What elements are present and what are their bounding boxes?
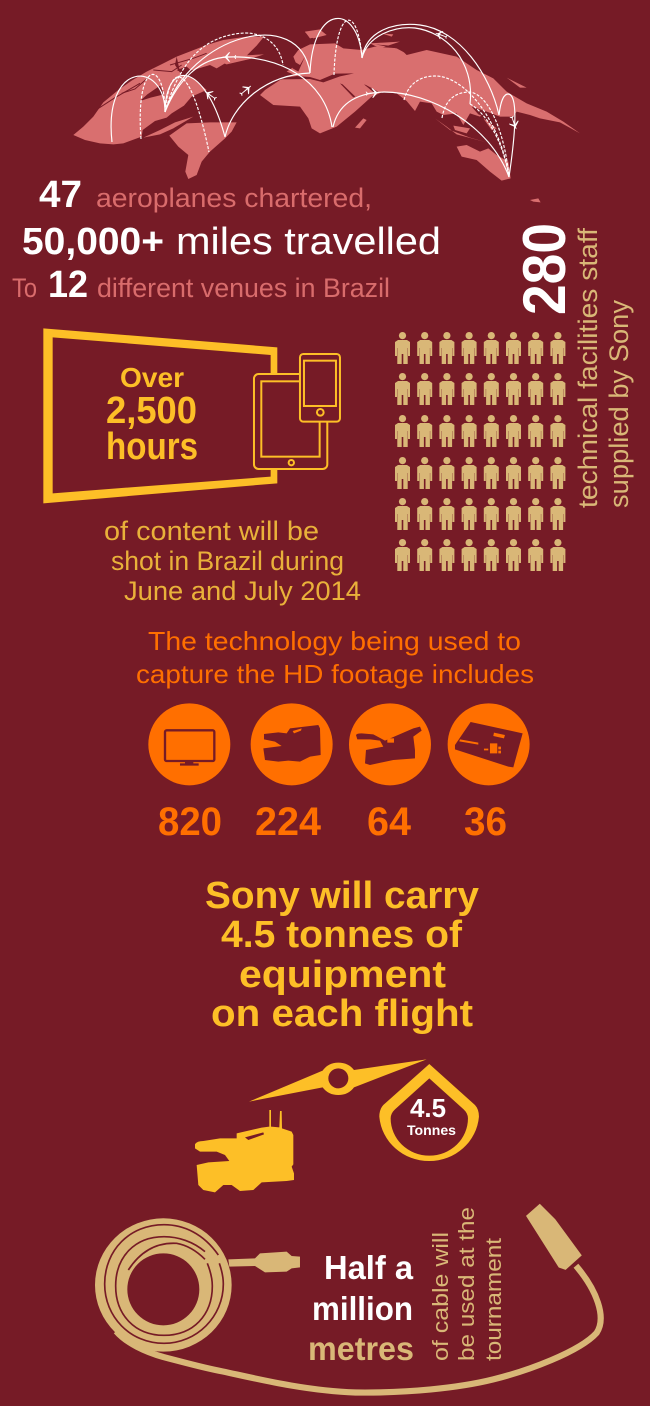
cable statistic: million (312, 1290, 413, 1327)
people grid (395, 332, 565, 571)
americas (73, 29, 323, 179)
technology heading (136, 626, 534, 689)
projection screen with tablet and phone (43, 328, 340, 503)
headline: aeroplanes, miles, venues: miles travelled (176, 221, 441, 263)
cable caption (428, 1207, 506, 1361)
tablet (254, 374, 327, 469)
icon: vision mixer (448, 703, 530, 785)
weight heading: 4.5 tonnes of (221, 914, 462, 956)
aeroplanes (202, 29, 521, 131)
headline: aeroplanes, miles, venues: aeroplanes chartered, (96, 183, 372, 213)
staff statistic (511, 223, 634, 508)
weight heading: equipment (239, 954, 446, 996)
weight label: 4.5 (410, 1093, 446, 1123)
camera silhouette (195, 1110, 294, 1192)
headline: aeroplanes, miles, venues: 12 (48, 264, 88, 306)
headline: aeroplanes, miles, venues: To (12, 273, 37, 303)
hours statistic (106, 362, 198, 468)
screen frame (43, 328, 277, 503)
weight (379, 1064, 479, 1161)
weight label: Tonnes (407, 1122, 456, 1138)
flight routes (111, 18, 515, 177)
cable tail and right plug (116, 1204, 601, 1393)
headline: aeroplanes, miles, venues: different venues in Brazil (97, 273, 390, 303)
equipment counts: 820 (158, 800, 222, 844)
cable statistic (308, 1249, 414, 1367)
cable statistic: metres (308, 1330, 414, 1367)
weight heading: on each flight (211, 993, 473, 1035)
cable caption: be used at the (454, 1207, 479, 1361)
staff statistic: supplied by Sony (604, 299, 634, 508)
content caption: June and July 2014 (124, 576, 361, 606)
staff statistic: technical facilities staff (573, 227, 603, 508)
balance arm (249, 1059, 427, 1102)
headline: aeroplanes, miles, venues: 50,000+ (22, 221, 164, 263)
equipment icons (148, 703, 530, 785)
technology heading: capture the HD footage includes (136, 659, 534, 689)
equipment counts: 36 (464, 800, 507, 844)
hours statistic: Over (120, 362, 184, 393)
icon: broadcast camera (251, 703, 333, 785)
headline: aeroplanes, miles, venues: 47 (39, 174, 82, 216)
equipment counts: 64 (367, 800, 412, 844)
eurasia, africa, australia (260, 30, 580, 202)
cable caption: tournament (481, 1238, 506, 1361)
cable coil and left plug (95, 1218, 300, 1352)
world map with flight routes (73, 18, 580, 202)
headline: aeroplanes, miles, venues (12, 174, 441, 306)
icon: handheld camera (349, 703, 431, 785)
technology heading: The technology being used to (148, 626, 521, 656)
weight heading: Sony will carry (205, 875, 479, 917)
cable statistic: Half a (324, 1249, 414, 1286)
equipment counts (158, 800, 507, 844)
phone (300, 354, 340, 422)
content caption: shot in Brazil during (111, 546, 344, 576)
equipment counts: 224 (255, 800, 322, 844)
cable caption: of cable will (428, 1232, 453, 1361)
hours statistic: 2,500 (106, 390, 197, 432)
content caption (104, 516, 361, 606)
content caption: of content will be (104, 516, 319, 546)
weight label (407, 1093, 456, 1138)
hours statistic: hours (106, 426, 198, 468)
staff statistic: 280 (511, 223, 578, 315)
icon: television (148, 703, 230, 785)
weight heading (205, 875, 479, 1035)
